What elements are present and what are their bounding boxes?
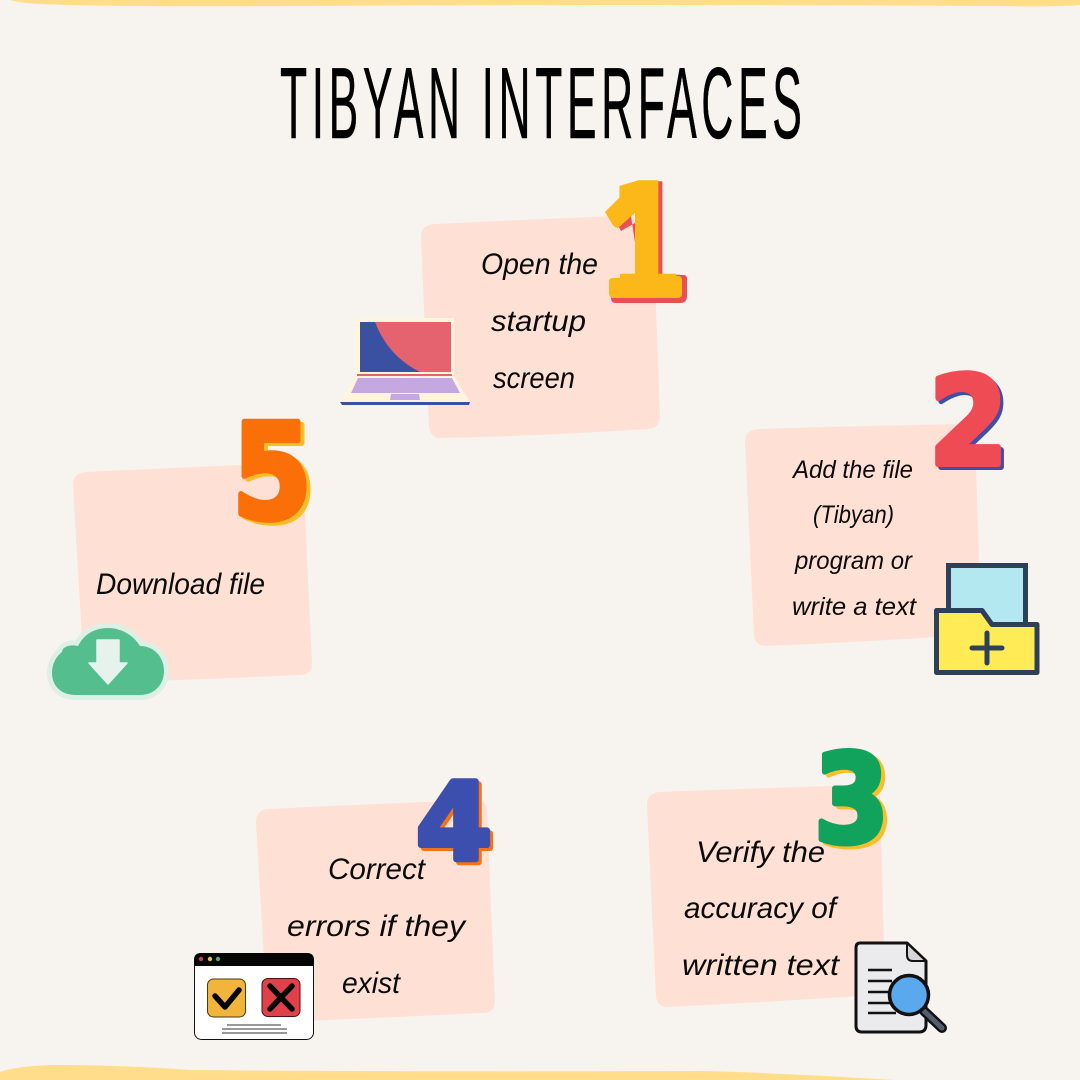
step 5 text: Download file <box>96 568 265 601</box>
step 1 text <box>481 248 598 395</box>
number 1: 1 <box>612 151 687 333</box>
panel background <box>421 215 660 438</box>
bottom yellow band <box>0 1065 895 1080</box>
step 4 text: errors if they <box>287 910 467 943</box>
number 5: 5 <box>232 396 312 550</box>
step 3 text <box>682 836 841 982</box>
number 3: 3 <box>818 732 893 874</box>
step 1 text: screen <box>493 362 575 395</box>
panel: step 5 <box>52 396 316 695</box>
step 2 text: program or <box>794 547 914 575</box>
panel background <box>745 424 981 646</box>
number 1: 1 <box>608 150 683 332</box>
step 2 text: Add the file <box>791 456 913 484</box>
icon: check and cross window <box>194 953 314 1040</box>
step 3 text: accuracy of <box>684 892 839 925</box>
number 3: 3 <box>814 729 889 871</box>
step 4 text <box>287 853 467 1000</box>
step 1 text: Open the <box>481 248 598 281</box>
step 4 text: Correct <box>328 853 427 886</box>
number 4: 4 <box>416 761 492 885</box>
number 5: 5 <box>236 399 316 553</box>
step 2 text <box>791 456 917 621</box>
step 3 text: Verify the <box>696 836 825 869</box>
top yellow band <box>10 0 1080 6</box>
icon: folder with plus <box>936 566 1037 672</box>
number 4: 4 <box>419 764 495 888</box>
step 1 text: startup <box>491 305 586 338</box>
step 2 text: (Tibyan) <box>813 501 894 529</box>
step 3 text: written text <box>682 949 841 982</box>
number 2: 2 <box>929 351 1008 493</box>
panel: step 1 <box>340 150 687 438</box>
panel background <box>73 463 312 683</box>
step 4 text: exist <box>342 967 402 1000</box>
icon: cloud download <box>52 628 164 695</box>
number 2: 2 <box>932 354 1011 496</box>
icon: document with magnifier <box>856 943 942 1032</box>
icon: laptop <box>340 318 470 405</box>
panel background <box>256 800 495 1022</box>
panel: step 4 <box>194 761 495 1040</box>
panel: step 3 <box>647 729 942 1032</box>
step 2 text: write a text <box>792 593 917 621</box>
title: TIBYAN INTERFACES <box>280 46 802 160</box>
panel: step 2 <box>745 351 1037 672</box>
panel background <box>647 785 885 1007</box>
